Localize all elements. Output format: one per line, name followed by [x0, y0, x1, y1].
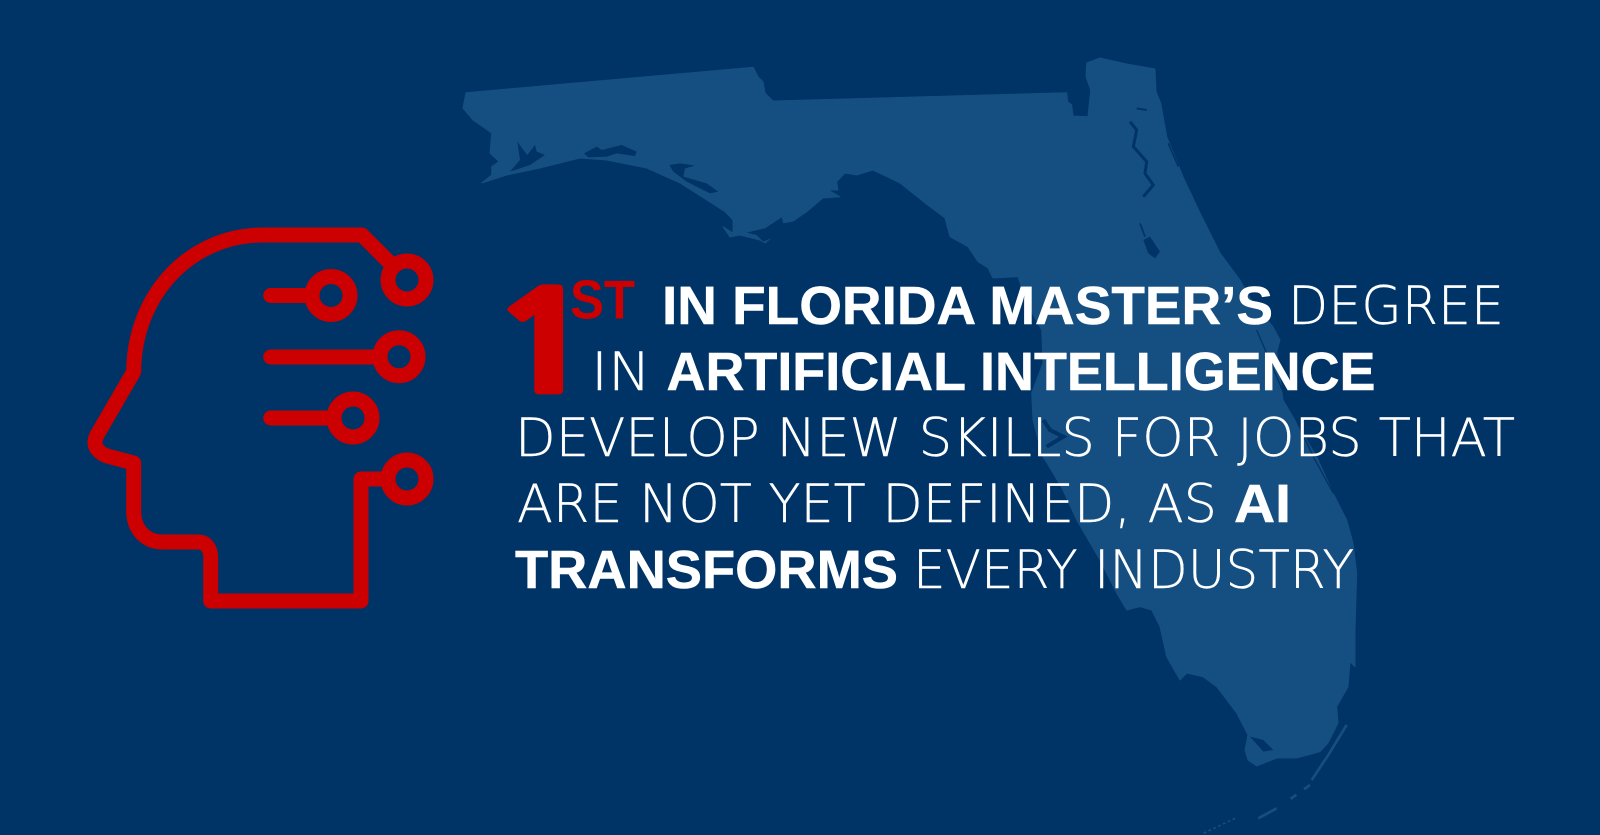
- headline and body text: ARE NOT YET DEFINED, AS: [517, 474, 1217, 535]
- ranking: 1st: [490, 268, 635, 412]
- headline and body text: [515, 276, 1515, 601]
- headline and body text: TRANSFORMS: [515, 540, 898, 600]
- headline and body text: IN: [591, 342, 651, 403]
- map: Florida silhouette: [463, 58, 1357, 833]
- headline and body text: AI: [1234, 474, 1291, 534]
- headline and body text: ARTIFICIAL INTELLIGENCE: [666, 342, 1376, 402]
- ranking: 1st: 1: [490, 274, 600, 412]
- icon: head with circuit nodes: [95, 235, 426, 601]
- headline and body text: DEGREE: [1288, 276, 1504, 337]
- headline and body text: DEVELOP NEW SKILLS FOR JOBS THAT: [515, 408, 1515, 469]
- headline and body text: IN FLORIDA MASTER’S: [662, 276, 1273, 336]
- ranking: 1st: ST: [570, 268, 635, 330]
- headline and body text: EVERY INDUSTRY: [913, 540, 1354, 601]
